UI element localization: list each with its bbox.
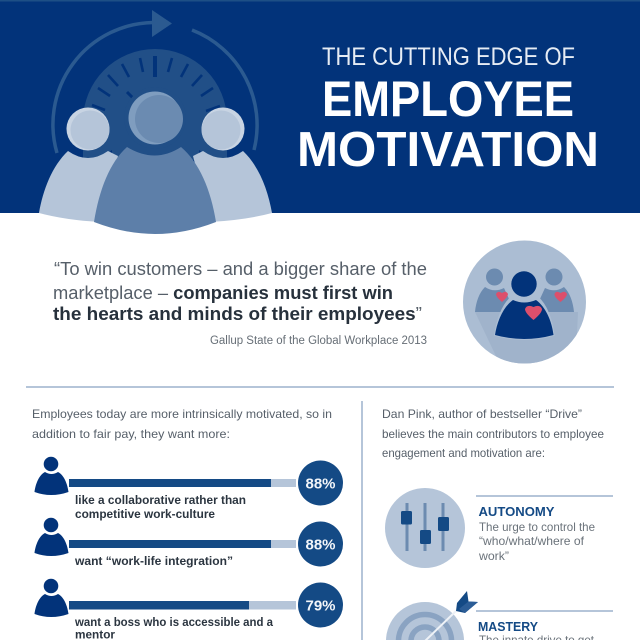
stat row 79% boss: want a boss who is accessible and a	[74, 615, 273, 629]
right intro text: Dan Pink, author of bestseller “Drive”	[382, 407, 582, 421]
stat row 88% work-life: want “work-life integration”	[74, 554, 233, 568]
icon: motivation gauge with team	[39, 10, 272, 234]
stat row 88% work-life: 88%	[306, 536, 336, 554]
title: MOTIVATION	[297, 123, 599, 177]
mastery text	[476, 610, 613, 640]
stat row 88% collaborative: 88%	[306, 476, 336, 492]
title: THE CUTTING EDGE OF	[322, 43, 575, 71]
stat row 88% collaborative: competitive work-culture	[75, 507, 215, 521]
icon: team with hearts	[463, 240, 586, 375]
header banner	[0, 0, 640, 213]
stat row 88% work-life	[34, 518, 343, 568]
title: EMPLOYEE	[322, 71, 574, 127]
quote: the hearts and minds of their employees ”	[53, 304, 422, 324]
autonomy text: The urge to control the	[479, 520, 595, 534]
autonomy text	[476, 495, 613, 563]
stat row 88% collaborative: like a collaborative rather than	[75, 493, 246, 507]
left intro text: Employees today are more intrinsically motivated, so in	[32, 407, 332, 421]
stat row 79% boss: 79%	[306, 598, 336, 614]
left intro text: addition to fair pay, they want more:	[32, 427, 230, 441]
right intro text	[382, 407, 604, 460]
gauge dial	[83, 49, 227, 160]
autonomy text: work”	[478, 549, 509, 563]
icon: sliders	[385, 488, 465, 568]
right intro text: believes the main contributors to employee	[382, 427, 604, 441]
icon: target with arrow	[386, 591, 478, 640]
center person	[94, 87, 216, 234]
right intro text: engagement and motivation are:	[382, 446, 545, 460]
autonomy text: “who/what/where of	[479, 534, 585, 548]
title	[297, 43, 599, 177]
quote: “To win customers – and a bigger share of the	[54, 259, 427, 279]
right person	[193, 108, 272, 222]
circular arrow	[53, 10, 257, 153]
quote source: Gallup State of the Global Workplace 2013	[210, 335, 427, 347]
stat row 79% boss	[34, 579, 343, 640]
mastery text: MASTERY	[478, 619, 538, 634]
left person	[39, 108, 118, 222]
left intro text	[32, 407, 332, 441]
section divider	[26, 386, 614, 388]
stat row 88% collaborative	[34, 457, 343, 521]
quote	[53, 259, 427, 324]
autonomy text: AUTONOMY	[478, 504, 555, 519]
quote: marketplace – companies must first win	[53, 283, 393, 303]
